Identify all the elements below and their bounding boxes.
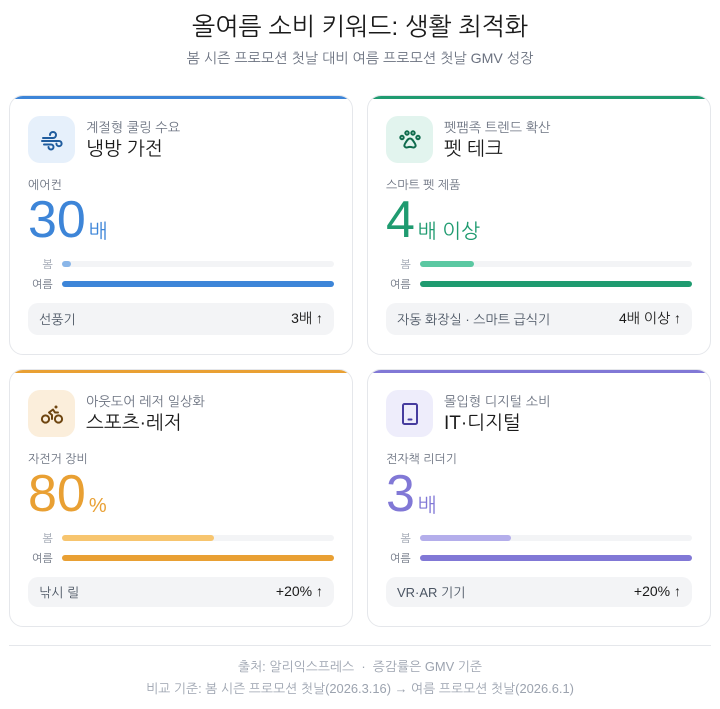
category tagline: 몰입형 디지털 소비 (444, 394, 550, 409)
panel: 냉방 가전 (9, 95, 353, 355)
secondary product pill (28, 577, 334, 607)
panel: 스포츠·레저 (9, 369, 353, 627)
secondary product pill (28, 303, 334, 335)
category tagline: 아웃도어 레저 일상화 (86, 394, 205, 409)
card accent bar (367, 369, 711, 373)
secondary product growth: 3배 ↑ (291, 310, 323, 326)
secondary product growth: +20% ↑ (634, 583, 681, 599)
icon: tablet (386, 390, 433, 437)
icon: cyclist (28, 390, 75, 437)
product label: 에어컨 (28, 178, 62, 192)
category heading: 냉방 가전 (86, 138, 163, 160)
big number: 80% (28, 465, 107, 523)
panel: 펫 테크 (367, 95, 711, 355)
spring bar label: 봄 (400, 533, 411, 545)
panel: IT·디지털 (367, 369, 711, 627)
secondary product name: VR·AR 기기 (397, 585, 466, 600)
category heading: 펫 테크 (444, 138, 503, 160)
product label: 전자책 리더기 (386, 452, 457, 466)
title: 올여름 소비 키워드: 생활 최적화 (192, 14, 528, 40)
category tagline: 계절형 쿨링 수요 (86, 120, 180, 135)
category tagline: 펫팸족 트렌드 확산 (444, 120, 550, 135)
category heading: IT·디지털 (444, 412, 521, 434)
summer bar label: 여름 (32, 279, 53, 291)
big number: 30배 (28, 191, 108, 249)
spring bar label: 봄 (42, 533, 53, 545)
secondary product name: 선풍기 (39, 312, 76, 327)
secondary product growth: 4배 이상 ↑ (619, 310, 681, 326)
icon: wind (28, 116, 75, 163)
card accent bar (9, 95, 353, 99)
footer: source: 출처: 알리익스프레스 · 증감률은 GMV 기준 (238, 658, 482, 674)
card accent bar (367, 95, 711, 99)
big number: 4배 이상 (386, 191, 480, 249)
category heading: 스포츠·레저 (86, 412, 182, 434)
spring bar (62, 535, 334, 541)
big number: 3배 (386, 465, 437, 523)
summer bar (62, 281, 334, 287)
summer bar (420, 281, 692, 287)
summer bar label: 여름 (32, 553, 53, 565)
product label: 스마트 펫 제품 (386, 178, 460, 192)
spring bar label: 봄 (400, 259, 411, 271)
spring bar (420, 535, 692, 541)
spring bar label: 봄 (42, 259, 53, 271)
summer bar (420, 555, 692, 561)
spring bar (62, 261, 334, 267)
product label: 자전거 장비 (28, 452, 88, 466)
icon: paw (386, 116, 433, 163)
secondary product growth: +20% ↑ (276, 583, 323, 599)
secondary product pill (386, 303, 692, 335)
spring bar (420, 261, 692, 267)
secondary product name: 낚시 릴 (39, 585, 79, 600)
summer bar label: 여름 (390, 279, 411, 291)
summer bar label: 여름 (390, 553, 411, 565)
secondary product name: 자동 화장실 · 스마트 급식기 (397, 312, 550, 327)
summer bar (62, 555, 334, 561)
secondary product pill (386, 577, 692, 607)
footer: comparison basis: 비교 기준: 봄 시즌 프로모션 첫날(2026.3.16) → 여름 프로모션 첫날(2026.6.1) (146, 680, 574, 696)
subtitle: 봄 시즌 프로모션 첫날 대비 여름 프로모션 첫날 GMV 성장 (187, 50, 533, 66)
card accent bar (9, 369, 353, 373)
